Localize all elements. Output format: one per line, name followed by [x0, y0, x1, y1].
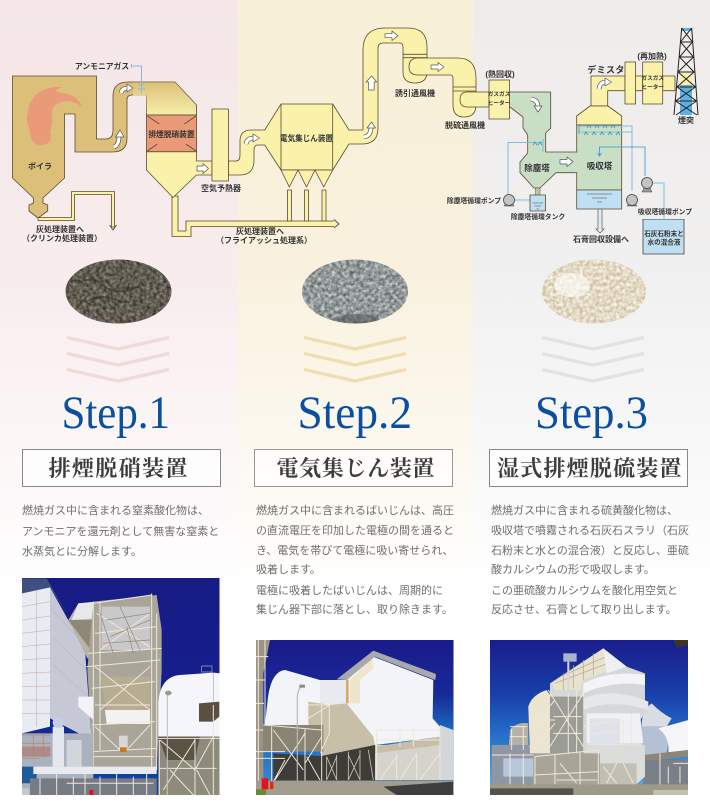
- pump and tank labels: 吸収塔循環ポンプ: [638, 207, 692, 216]
- description 3: 酸カルシウムの形で吸収します。: [491, 562, 655, 576]
- description 2: 吸着します。: [256, 562, 321, 576]
- denitration lower body: [146, 152, 212, 198]
- description 2: き、電気を帯びて電極に吸い寄せられ、: [256, 543, 453, 557]
- reheating label: (再加熱): [637, 51, 667, 61]
- description 1: アンモニアを還元剤として無害な窒素と: [22, 524, 219, 538]
- title box 3: 湿式排煙脱硫装置: [497, 456, 682, 481]
- dust tower label: 除塵塔: [524, 163, 550, 173]
- chevrons 3: [542, 338, 644, 381]
- icon: boiler flame: [27, 87, 82, 145]
- ash label: 灰処理装置へ: [36, 224, 84, 234]
- gypsum arrow: [596, 209, 604, 233]
- dust tower: [510, 92, 577, 188]
- heat recovery label: (熱回収): [485, 69, 515, 79]
- title box 2: [254, 450, 452, 486]
- fly ash arrow head: [334, 220, 339, 228]
- denitration catalyst: [146, 115, 196, 152]
- description 3: [491, 503, 689, 616]
- fly ash label: 灰処理装置へ: [236, 226, 284, 236]
- pump and tank labels: 除塵塔循環タンク: [511, 212, 565, 221]
- gas heater 2: ガスガス: [642, 74, 664, 82]
- photo 1: [22, 578, 220, 797]
- absorber water level: [587, 194, 612, 202]
- ID fan label: 誘引通風機: [395, 88, 435, 98]
- description 2: 電極に吸着したばいじんは、周期的に: [256, 583, 443, 597]
- step 1 heading: Step.1: [62, 387, 170, 439]
- title box 2: 電気集じん装置: [276, 456, 434, 481]
- chimney label: 煙突: [678, 115, 694, 125]
- dust tower tank: [530, 188, 546, 211]
- chevrons 1: [67, 338, 169, 381]
- joint patch: [575, 152, 579, 172]
- gas heater 1: ガスガス: [488, 90, 511, 98]
- title box 1: 排煙脱硝装置: [48, 456, 188, 481]
- air heater: [212, 109, 228, 181]
- boiler and flue duct: [12, 76, 196, 218]
- hoppers: [281, 170, 333, 187]
- description 3: 燃焼ガス中に含まれる硫黄酸化物は、: [491, 503, 678, 517]
- denitration catalyst: 排煙脱硝装置: [148, 129, 194, 139]
- precipitator lines: [281, 54, 427, 170]
- limestone mix tank: 石灰石粉末と: [644, 229, 684, 238]
- desulfurization fan label: 脱硫通風機: [445, 120, 485, 130]
- pumps: [504, 178, 652, 206]
- demister label: デミスタ: [587, 64, 625, 75]
- spray and circulation lines: [508, 124, 664, 219]
- reactor top gradient: [133, 82, 196, 115]
- description 1: 燃焼ガス中に含まれる窒素酸化物は、: [22, 503, 209, 517]
- fly ash label: [216, 226, 312, 245]
- fly ash label: （フライアッシュ処理系）: [216, 235, 312, 245]
- description 1: [22, 503, 219, 558]
- chevrons 2: [304, 338, 406, 381]
- step 2 heading: Step.2: [298, 387, 412, 439]
- absorber label: 吸収塔: [587, 161, 613, 171]
- gas heater 1: ヒーター: [488, 99, 511, 107]
- rock sample 3: [542, 260, 646, 324]
- description 2: の直流電圧を印加した電極の間を通ると: [256, 523, 454, 537]
- ID fan duct: [409, 58, 476, 117]
- rock sample 1: [66, 260, 172, 324]
- description 3: この亜硫酸カルシウムを酸化用空気と: [491, 583, 678, 597]
- panel backgrounds: [0, 0, 710, 600]
- photo 3: [490, 640, 690, 795]
- step 3 heading: Step.3: [535, 387, 648, 439]
- panel: step 2: [254, 255, 454, 795]
- rock sample 2: [302, 260, 408, 324]
- ash label: （クリンカ処理装置）: [22, 233, 102, 243]
- limestone mix tank: 水の混合液: [648, 238, 681, 246]
- description 3: 石粉末と水との混合液）と反応し、亜硫: [491, 543, 689, 557]
- ammonia label: アンモニアガス: [75, 61, 129, 71]
- ash pipe from boiler: [38, 192, 114, 227]
- title box 3: [490, 450, 688, 486]
- hopper pipes: [288, 190, 326, 221]
- gas heater 2: [642, 62, 664, 104]
- fan bands: [453, 87, 476, 91]
- ash pipe arrow head: [110, 225, 116, 230]
- pump and tank labels: 石膏回収設備へ: [573, 234, 629, 244]
- chimney: [674, 28, 698, 115]
- precipitator label: 電気集じん装置: [280, 133, 333, 143]
- process flow diagram: [12, 28, 698, 254]
- description 2: 集じん器下部に落とし、取り除きます。: [256, 602, 453, 616]
- description 3: 吸収塔で噴霧される石灰石スラリ（石灰: [491, 524, 689, 537]
- pump and tank labels: [447, 196, 692, 244]
- pump and tank labels: 除塵塔循環ポンプ: [447, 196, 501, 205]
- panel: step 3: [490, 255, 690, 795]
- fly ash pipe: [172, 196, 336, 236]
- air heater label: 空気予熱器: [201, 183, 241, 193]
- precipitator and duct: [228, 28, 427, 175]
- panel: step 1: [22, 255, 220, 797]
- title box 1: [22, 450, 220, 486]
- description 2: 燃焼ガス中に含まれるばいじんは、高圧: [256, 503, 454, 517]
- demister box: [625, 62, 636, 104]
- pipe to gas heater: [460, 92, 489, 107]
- reheater ducts: [636, 76, 675, 91]
- ash label: [22, 224, 102, 243]
- boiler label: ボイラ: [28, 161, 52, 171]
- limestone mix tank: [643, 219, 684, 254]
- gas heater 1: [488, 80, 511, 119]
- gas heater 2: ヒーター: [642, 83, 664, 91]
- description 2: [256, 503, 454, 616]
- description 1: 水蒸気とに分解します。: [22, 544, 142, 558]
- absorber tower: [577, 76, 625, 209]
- description 3: 反応させ、石膏として取り出します。: [491, 602, 677, 616]
- ammonia line: [132, 64, 145, 93]
- photo 2: [256, 640, 454, 795]
- flow arrows: [114, 31, 612, 174]
